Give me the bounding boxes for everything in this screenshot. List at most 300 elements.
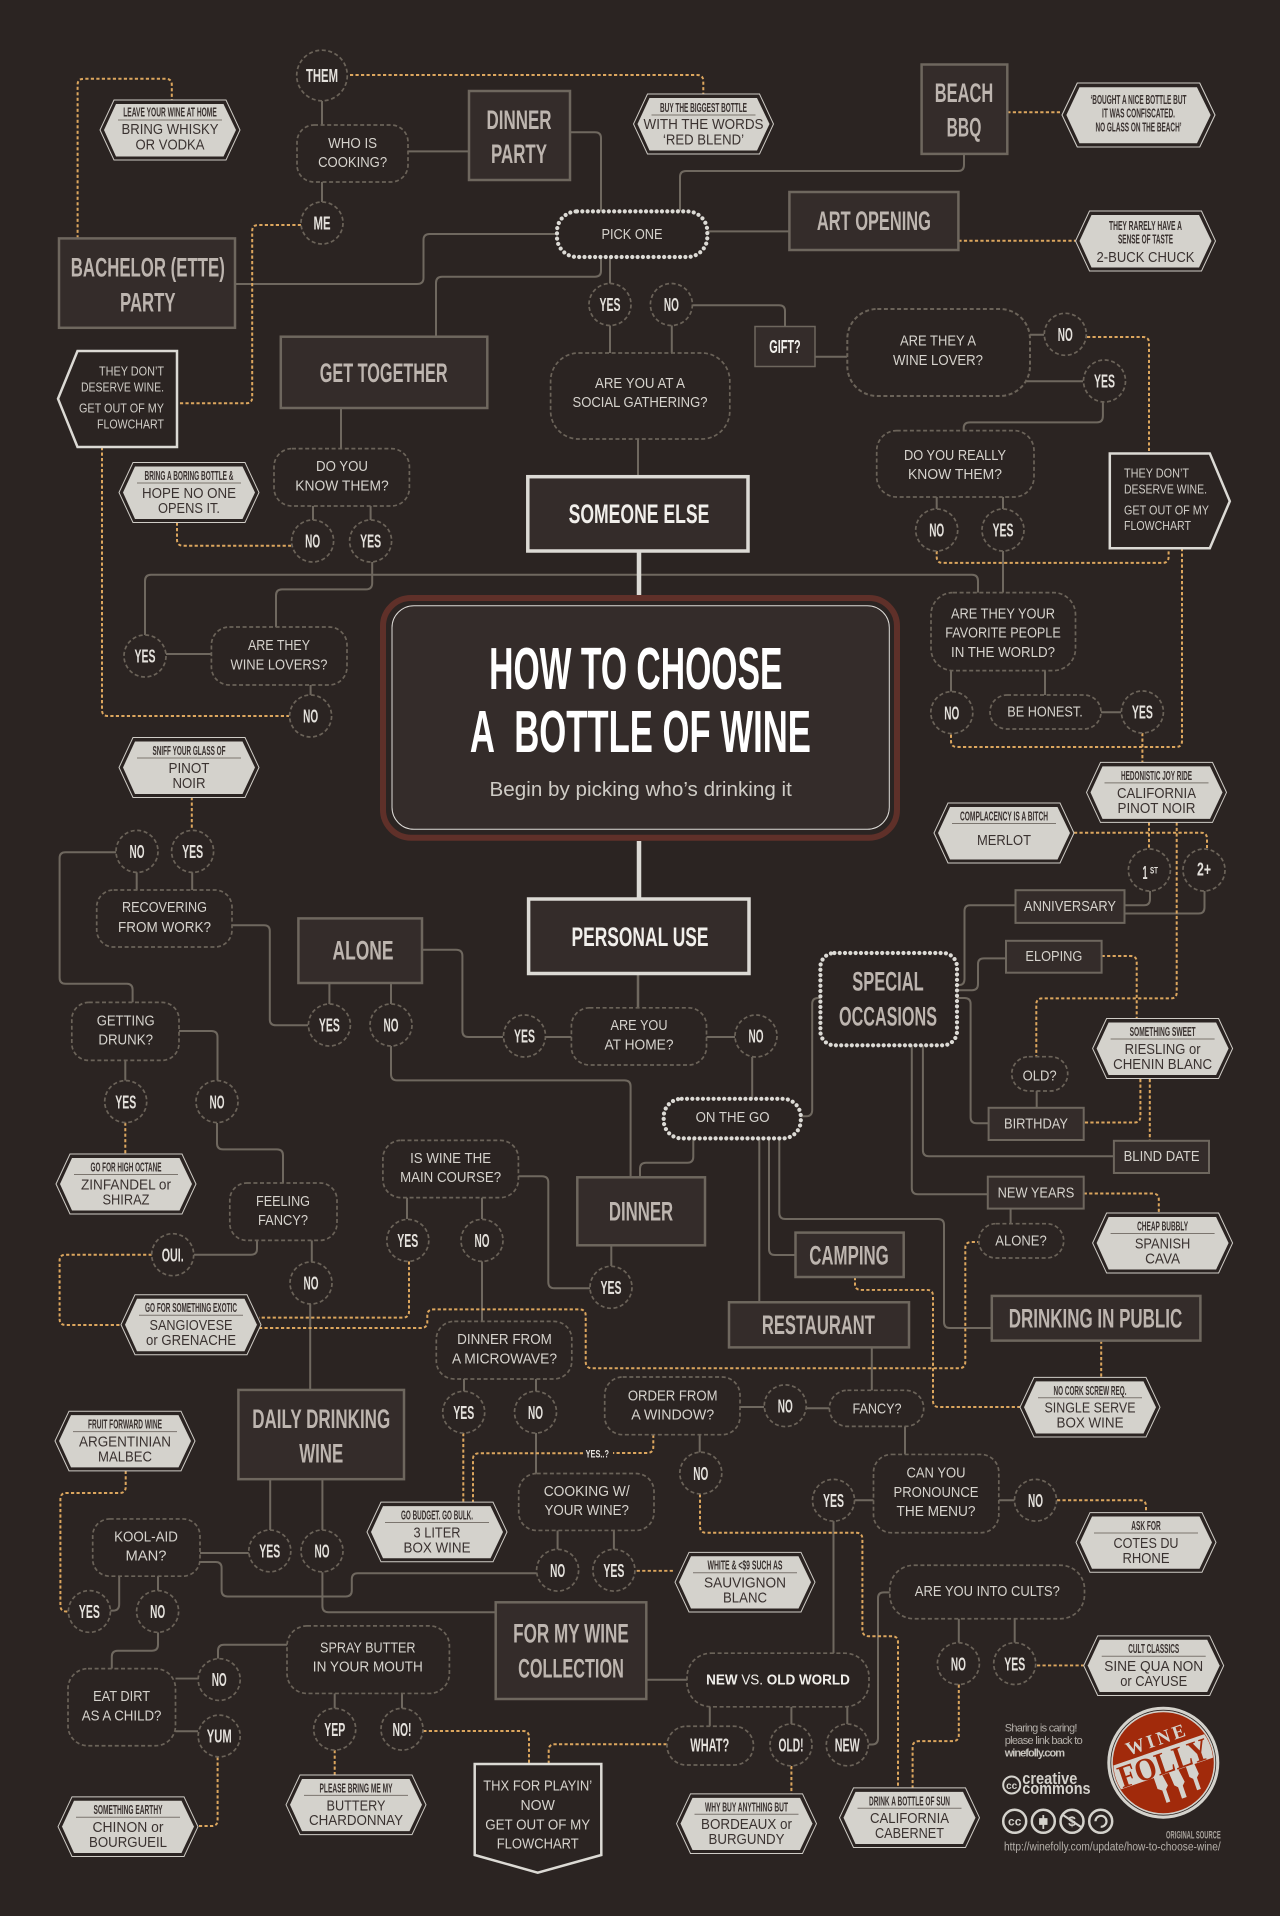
wine: bring whisky or vodka xyxy=(100,100,240,160)
answer: yes xyxy=(249,1530,291,1572)
answer: no: NO xyxy=(212,1669,227,1690)
box: daily drinking wine: DAILY DRINKING xyxy=(252,1404,390,1434)
sign: thx for playin: GET OUT OF MY xyxy=(485,1816,590,1833)
question: be honest xyxy=(990,695,1101,729)
answer: yes xyxy=(350,520,392,562)
question: into cults: ARE YOU INTO CULTS? xyxy=(915,1583,1060,1600)
question: old xyxy=(1012,1057,1068,1091)
answer: yes: YES xyxy=(134,646,156,667)
answer: yes: YES xyxy=(319,1015,340,1036)
question: cooking with your wine xyxy=(519,1474,654,1530)
start pill: pick one: PICK ONE xyxy=(602,227,663,243)
answer: me xyxy=(301,202,343,244)
wine: hope no one opens it: HOPE NO ONE xyxy=(142,485,236,502)
wine: buttery chardonnay: CHARDONNAY xyxy=(309,1812,403,1829)
title: HOW TO CHOOSE xyxy=(489,636,782,702)
wine: 3 liter box wine: 3 LITER xyxy=(414,1524,461,1541)
question: eat dirt xyxy=(68,1669,176,1746)
wine: bordeaux or burgundy xyxy=(676,1794,816,1853)
question: social gathering: ARE YOU AT A xyxy=(595,375,685,392)
question: pronounce the menu xyxy=(874,1454,999,1533)
answer: no: NO xyxy=(693,1463,708,1484)
answer: oui: OUI. xyxy=(162,1244,184,1265)
answer: no xyxy=(937,1643,979,1685)
answer: no xyxy=(916,509,958,551)
creative commons logo: commons xyxy=(1022,1779,1091,1798)
box: eloping xyxy=(1006,941,1102,973)
source url: http://winefolly.com/update/how-to-choose-wine/ xyxy=(1004,1842,1221,1854)
question: wine lover: WINE LOVER? xyxy=(893,352,983,369)
question: spray butter: IN YOUR MOUTH xyxy=(313,1659,423,1676)
answer: yes xyxy=(308,1004,350,1046)
box: blind date xyxy=(1114,1141,1209,1173)
question: spray butter xyxy=(287,1626,449,1693)
answer: yes: YES xyxy=(603,1560,624,1581)
answer: yes xyxy=(504,1015,546,1057)
wine: cotes du rhone xyxy=(1076,1513,1216,1572)
box: camping: CAMPING xyxy=(809,1240,889,1270)
answer: no: NO xyxy=(305,531,320,552)
wine: sauvignon blanc: BLANC xyxy=(723,1590,767,1607)
box: daily drinking wine: WINE xyxy=(299,1439,343,1469)
answer: yes xyxy=(994,1643,1036,1685)
wine: chinon or bourgueil: CHINON or xyxy=(92,1819,164,1836)
question: dinner from a microwave xyxy=(436,1321,572,1379)
answer: first anniversary: ST xyxy=(1150,866,1158,876)
wine: argentinian malbec: ARGENTINIAN xyxy=(79,1434,171,1450)
wine: chinon or bourgueil xyxy=(58,1797,198,1856)
sign: they don't deserve wine (right): GET OUT OF MY xyxy=(1124,503,1209,518)
wine: pinot noir: PINOT xyxy=(168,760,210,777)
answer: no!: NO! xyxy=(393,1719,412,1740)
question: dinner from a microwave: A MICROWAVE? xyxy=(452,1351,557,1367)
wine: zinfandel or shiraz: SHIRAZ xyxy=(102,1192,150,1208)
start pill: pick one xyxy=(557,211,707,257)
question: what xyxy=(667,1726,754,1765)
box: personal use xyxy=(529,899,749,974)
box: get together xyxy=(281,337,487,408)
sign: they don't deserve wine (right): DESERVE WINE. xyxy=(1124,482,1207,496)
wine: red blend: ‘RED BLEND’ xyxy=(663,132,744,148)
start pill: on the go: ON THE GO xyxy=(696,1109,770,1126)
answer: yes: YES xyxy=(259,1541,280,1562)
answer: no xyxy=(461,1219,503,1261)
box: eloping: ELOPING xyxy=(1025,948,1082,965)
question: new vs old world xyxy=(687,1653,869,1707)
wine: riesling or chenin blanc xyxy=(1093,1018,1233,1078)
creative commons logo: creative xyxy=(1022,1769,1077,1788)
box: new years xyxy=(988,1177,1084,1209)
wine: merlot: COMPLACENCY IS A BITCH xyxy=(960,810,1048,824)
question: pronounce the menu: PRONOUNCE xyxy=(894,1484,979,1501)
wine: hope no one opens it: OPENS IT. xyxy=(158,500,220,517)
question: wine lovers: ARE THEY xyxy=(248,637,310,654)
wine: zinfandel or shiraz: GO FOR HIGH OCTANE xyxy=(90,1160,162,1174)
wine: bordeaux or burgundy: WHY BUY ANYTHING BUT xyxy=(705,1800,788,1814)
answer: yes: YES xyxy=(1094,371,1115,392)
answer: no: NO xyxy=(130,841,144,862)
question: order from a window xyxy=(605,1377,740,1435)
sign: they don't deserve wine (left): FLOWCHART xyxy=(97,417,164,432)
dotted connectors to wine picks xyxy=(60,75,1207,1764)
question: at home xyxy=(571,1008,706,1065)
question: be honest: BE HONEST. xyxy=(1007,704,1083,721)
wine: bordeaux or burgundy: BURGUNDY xyxy=(708,1831,785,1848)
wine: pinot noir xyxy=(119,738,259,798)
question: new vs old world: NEW VS. OLD WORLD xyxy=(706,1672,850,1689)
answer: yes xyxy=(812,1479,854,1521)
question: recovering from work xyxy=(97,890,232,947)
box: someone else: SOMEONE ELSE xyxy=(569,499,709,529)
box: dinner party xyxy=(469,91,570,180)
wine: spanish cava xyxy=(1093,1213,1233,1273)
box: someone else xyxy=(528,477,748,551)
wine: california cabernet: CALIFORNIA xyxy=(870,1810,949,1827)
answer: yes xyxy=(387,1219,429,1261)
answer: no xyxy=(196,1081,238,1123)
sharing note: winefolly.com xyxy=(1004,1747,1065,1759)
label: yes..?: YES..? xyxy=(586,1448,609,1460)
wine: california pinot noir: CALIFORNIA xyxy=(1117,785,1196,802)
answer: no xyxy=(137,1591,179,1632)
box: beach bbq xyxy=(922,64,1007,154)
box: get together: GET TOGETHER xyxy=(320,358,448,388)
lower solid connector lines xyxy=(110,1304,1015,1744)
original source label: ORIGINAL SOURCE xyxy=(1166,1829,1221,1841)
answer: yes xyxy=(443,1391,485,1433)
sharing note xyxy=(1004,1723,1083,1759)
wine: bordeaux or burgundy: BORDEAUX or xyxy=(701,1816,792,1833)
creative commons logo: cc xyxy=(1006,1781,1018,1792)
wine: bring whisky or vodka: LEAVE YOUR WINE AT HOME xyxy=(123,106,217,120)
answer: no: NO xyxy=(474,1230,490,1251)
wine: single serve box wine: NO CORK SCREW REQ. xyxy=(1053,1384,1127,1398)
creative commons logo xyxy=(1003,1769,1091,1798)
answer: oui xyxy=(152,1234,194,1276)
question: feeling fancy xyxy=(230,1183,337,1240)
answer: no xyxy=(116,830,158,872)
answer: no: NO xyxy=(778,1395,793,1416)
answer: yes: YES xyxy=(600,1277,622,1298)
sign: thx for playin: FLOWCHART xyxy=(497,1836,579,1853)
answer: yes: YES xyxy=(115,1091,136,1112)
answer: yum: YUM xyxy=(207,1726,232,1747)
answer: new xyxy=(826,1724,868,1766)
wine folly seal xyxy=(1107,1706,1220,1819)
wine: sauvignon blanc: WHITE & <$9 SUCH AS xyxy=(708,1559,782,1573)
question: old: OLD? xyxy=(1023,1067,1057,1084)
license icons: cc xyxy=(1008,1814,1022,1828)
answer: yes xyxy=(172,830,214,872)
answer: no: NO xyxy=(748,1026,764,1047)
wine: red blend: BUY THE BIGGEST BOTTLE xyxy=(660,101,747,115)
box: drinking in public: DRINKING IN PUBLIC xyxy=(1009,1304,1182,1333)
answer: no xyxy=(198,1659,240,1700)
wine: riesling or chenin blanc: SOMETHING SWEET xyxy=(1130,1025,1196,1039)
wine: sangiovese or grenache xyxy=(121,1295,261,1355)
sign: they don't deserve wine (right): THEY DON’T xyxy=(1124,466,1189,481)
wine: california pinot noir xyxy=(1086,762,1226,822)
question: fancy xyxy=(829,1390,924,1426)
wine: sine qua non or cayuse: CULT CLASSICS xyxy=(1128,1642,1179,1656)
box: alone xyxy=(298,918,422,983)
answer: no xyxy=(370,1004,412,1046)
box: dinner: DINNER xyxy=(609,1196,673,1226)
license icons xyxy=(1003,1810,1112,1833)
question: getting drunk: GETTING xyxy=(97,1012,155,1029)
wine: buttery chardonnay: PLEASE BRING ME MY xyxy=(319,1781,393,1795)
box: camping xyxy=(796,1233,904,1277)
sign: thx for playin: NOW xyxy=(521,1797,556,1814)
question: really know them: DO YOU REALLY xyxy=(904,447,1006,464)
question: dinner from a microwave: DINNER FROM xyxy=(457,1331,552,1348)
wine: chinon or bourgueil: SOMETHING EARTHY xyxy=(93,1803,163,1817)
wine: hope no one opens it xyxy=(119,462,259,522)
wine: single serve box wine: SINGLE SERVE xyxy=(1044,1400,1136,1417)
wine: california cabernet: DRINK A BOTTLE OF SUN xyxy=(869,1794,950,1808)
answer: new: NEW xyxy=(835,1735,860,1756)
wine: chinon or bourgueil: BOURGUEIL xyxy=(89,1834,167,1851)
lower dotted connectors xyxy=(60,1277,1146,1826)
wine: spanish cava: SPANISH xyxy=(1135,1236,1190,1252)
answer: yum xyxy=(198,1715,240,1757)
wine: argentinian malbec: MALBEC xyxy=(98,1448,152,1465)
answer: yes: YES xyxy=(397,1230,418,1251)
answer: no xyxy=(931,692,973,734)
wine: pinot noir: SNIFF YOUR GLASS OF xyxy=(152,744,226,758)
box: for my wine collection: FOR MY WINE xyxy=(513,1619,629,1649)
question: getting drunk: DRUNK? xyxy=(98,1032,153,1048)
answer: no xyxy=(764,1385,806,1427)
question: wine lover xyxy=(847,309,1030,396)
wine: zinfandel or shiraz xyxy=(56,1154,196,1214)
wine: sangiovese or grenache: SANGIOVESE xyxy=(150,1317,232,1334)
answer: no: NO xyxy=(303,706,318,727)
wine folly seal: WINE xyxy=(1123,1721,1188,1760)
wine: red blend: WITH THE WORDS xyxy=(644,116,764,133)
question: know them: KNOW THEM? xyxy=(295,478,389,495)
box: beach bbq: BEACH xyxy=(935,78,993,108)
start pill: special occasions: OCCASIONS xyxy=(839,1001,937,1031)
answer: no xyxy=(680,1452,722,1494)
question: main course: MAIN COURSE? xyxy=(400,1169,501,1186)
sign: they don't deserve wine (left) xyxy=(58,351,177,447)
wine: merlot: MERLOT xyxy=(977,832,1031,849)
wine: 3 liter box wine: GO BUDGET. GO BULK. xyxy=(401,1509,473,1523)
wine: argentinian malbec: FRUIT FORWARD WINE xyxy=(88,1418,162,1432)
box: gift xyxy=(755,326,815,366)
wine: 2-buck chuck: SENSE OF TASTE xyxy=(1118,233,1173,247)
wine: california cabernet xyxy=(840,1788,980,1848)
question: getting drunk xyxy=(72,1002,179,1060)
wine: sine qua non or cayuse: SINE QUA NON xyxy=(1104,1658,1203,1675)
answer: no: NO xyxy=(384,1015,398,1036)
question: kool-aid man xyxy=(93,1519,200,1576)
question: cooking with your wine: COOKING W/ xyxy=(544,1483,630,1500)
wine: sangiovese or grenache: or GRENACHE xyxy=(146,1332,236,1349)
wine: no glass on the beach: ‘BOUGHT A NICE BOTTLE BUT xyxy=(1090,93,1187,107)
sign: they don't deserve wine (left): DESERVE WINE. xyxy=(81,379,164,394)
answer: yes: YES xyxy=(514,1026,535,1047)
answer: no xyxy=(301,1530,343,1572)
wine: california cabernet: CABERNET xyxy=(875,1825,944,1842)
question: order from a window: ORDER FROM xyxy=(628,1388,718,1405)
answer: no xyxy=(514,1391,556,1433)
answer: no xyxy=(290,1262,332,1304)
box: anniversary: ANNIVERSARY xyxy=(1024,898,1116,915)
answer: yes: YES xyxy=(1004,1653,1025,1674)
wine: cotes du rhone: RHONE xyxy=(1122,1550,1170,1567)
wine: riesling or chenin blanc: RIESLING or xyxy=(1125,1041,1201,1058)
question: into cults xyxy=(890,1565,1084,1619)
wine: 2-buck chuck: 2-BUCK CHUCK xyxy=(1096,249,1194,266)
question: fancy: FANCY? xyxy=(852,1401,901,1417)
question: alone xyxy=(979,1224,1064,1258)
question: recovering from work: RECOVERING xyxy=(122,899,207,916)
answer: them: THEM xyxy=(306,65,338,86)
sign: they don't deserve wine (right) xyxy=(1110,454,1230,548)
answer: yes xyxy=(1084,360,1126,402)
answer: no xyxy=(735,1015,777,1057)
wine: california pinot noir: PINOT NOIR xyxy=(1118,800,1196,817)
answer: yes xyxy=(590,1266,632,1308)
title xyxy=(470,636,811,765)
answer: yes: YES xyxy=(453,1402,474,1423)
answer: no: NO xyxy=(550,1560,565,1581)
question: know them: DO YOU xyxy=(316,458,368,475)
wine: california pinot noir: HEDONISTIC JOY RIDE xyxy=(1121,769,1192,783)
answer: yep xyxy=(314,1708,356,1750)
question: wine lovers: WINE LOVERS? xyxy=(230,656,328,673)
wine: red blend xyxy=(634,94,774,154)
wine: argentinian malbec xyxy=(55,1411,195,1471)
answer: no: NO xyxy=(304,1273,318,1294)
box: bachelor(ette) party xyxy=(59,238,235,328)
question: favorite people: FAVORITE PEOPLE xyxy=(945,625,1061,642)
question: who is cooking: WHO IS xyxy=(328,135,377,152)
answer: yes: YES xyxy=(360,531,381,552)
wine: sine qua non or cayuse xyxy=(1084,1636,1224,1695)
wine: 3 liter box wine: BOX WINE xyxy=(404,1539,471,1556)
answer: no: NO xyxy=(528,1402,543,1423)
answer: no xyxy=(650,284,692,326)
question: main course xyxy=(383,1140,518,1198)
title: A BOTTLE OF WINE xyxy=(470,699,811,765)
question: order from a window: A WINDOW? xyxy=(631,1407,714,1424)
question: know them xyxy=(274,449,409,506)
answer: no: NO xyxy=(929,520,944,541)
question: really know them: KNOW THEM? xyxy=(908,466,1002,483)
solid connector lines xyxy=(60,101,1205,1680)
title panel xyxy=(383,598,897,838)
wine: hope no one opens it: BRING A BORING BOTTLE & xyxy=(144,469,234,483)
answer: no: NO xyxy=(210,1091,224,1112)
question: eat dirt: AS A CHILD? xyxy=(82,1707,161,1724)
answer: no: NO xyxy=(951,1653,966,1674)
wine: bring whisky or vodka: OR VODKA xyxy=(136,136,204,153)
question: who is cooking: COOKING? xyxy=(318,154,387,171)
answer: no xyxy=(537,1549,579,1591)
wine: no glass on the beach: IT WAS CONFISCATED. xyxy=(1102,106,1175,120)
box: personal use: PERSONAL USE xyxy=(572,922,708,952)
sign: they don't deserve wine (left): THEY DON’T xyxy=(99,364,164,378)
box: for my wine collection xyxy=(496,1602,646,1699)
box: dinner party: DINNER xyxy=(486,105,552,135)
box: drinking in public xyxy=(992,1296,1200,1341)
wine: sauvignon blanc: SAUVIGNON xyxy=(704,1575,786,1592)
answer: 2+ xyxy=(1183,849,1225,891)
question: what: WHAT? xyxy=(690,1734,729,1755)
wine: sangiovese or grenache: GO FOR SOMETHING EXOTIC xyxy=(145,1301,237,1315)
answer: yes: YES xyxy=(600,294,620,315)
answer: yes: YES xyxy=(182,841,203,862)
question: favorite people: IN THE WORLD? xyxy=(951,644,1055,661)
wine: single serve box wine: BOX WINE xyxy=(1056,1415,1124,1432)
wine: riesling or chenin blanc: CHENIN BLANC xyxy=(1113,1056,1212,1073)
question: social gathering xyxy=(551,353,730,439)
answer: yes xyxy=(1121,691,1163,733)
start pill: special occasions: SPECIAL xyxy=(852,967,924,997)
box: birthday: BIRTHDAY xyxy=(1004,1116,1068,1133)
wine folly seal: FOLLY xyxy=(1113,1730,1214,1795)
wine: pinot noir: NOIR xyxy=(172,775,206,792)
answer: no: NO xyxy=(314,1541,330,1562)
wine: no glass on the beach: NO GLASS ON THE BEACH’ xyxy=(1096,120,1182,134)
question: favorite people xyxy=(931,593,1076,671)
question: at home: AT HOME? xyxy=(604,1036,674,1053)
answer: yes xyxy=(124,635,166,677)
answer: first anniversary: 1 xyxy=(1142,862,1148,883)
answer: no: NO xyxy=(664,294,679,315)
question: main course: IS WINE THE xyxy=(410,1150,491,1167)
wine: merlot xyxy=(934,803,1074,863)
answer: no xyxy=(1044,313,1086,355)
question: feeling fancy: FANCY? xyxy=(258,1212,308,1229)
question: really know them xyxy=(877,431,1034,497)
box: dinner xyxy=(577,1177,705,1245)
box: art opening: ART OPENING xyxy=(817,206,931,236)
box: daily drinking wine xyxy=(238,1390,404,1479)
answer: them xyxy=(297,50,347,101)
sharing note: Sharing is caring! xyxy=(1005,1723,1077,1735)
wine: 2-buck chuck: THEY RARELY HAVE A xyxy=(1109,219,1182,233)
question: kool-aid man: KOOL-AID xyxy=(114,1528,178,1545)
answer: yep: YEP xyxy=(324,1719,345,1740)
question: feeling fancy: FEELING xyxy=(256,1193,310,1210)
answer: yes xyxy=(68,1591,110,1632)
sign: thx for playin: THX FOR PLAYIN’ xyxy=(483,1778,592,1795)
answer: yes xyxy=(105,1081,147,1123)
answer: yes: YES xyxy=(79,1601,100,1622)
wine: buttery chardonnay: BUTTERY xyxy=(326,1797,386,1814)
answer: yes: YES xyxy=(992,520,1014,541)
answer: no xyxy=(1014,1479,1056,1521)
answer: 2+: 2+ xyxy=(1197,858,1211,880)
sign: they don't deserve wine (right): FLOWCHART xyxy=(1124,518,1191,533)
question: kool-aid man: MAN? xyxy=(126,1548,167,1565)
box: for my wine collection: COLLECTION xyxy=(518,1653,624,1683)
question: pronounce the menu: CAN YOU xyxy=(907,1465,966,1482)
answer: no xyxy=(290,695,332,737)
answer: yes xyxy=(593,1549,635,1591)
wine: cotes du rhone: ASK FOR xyxy=(1131,1519,1161,1533)
box: alone: ALONE xyxy=(332,936,394,966)
box: dinner party: PARTY xyxy=(491,139,547,169)
answer: yes: YES xyxy=(1132,702,1153,723)
box: restaurant xyxy=(729,1302,909,1347)
answer: no: NO xyxy=(944,702,959,723)
question: spray butter: SPRAY BUTTER xyxy=(320,1639,416,1656)
